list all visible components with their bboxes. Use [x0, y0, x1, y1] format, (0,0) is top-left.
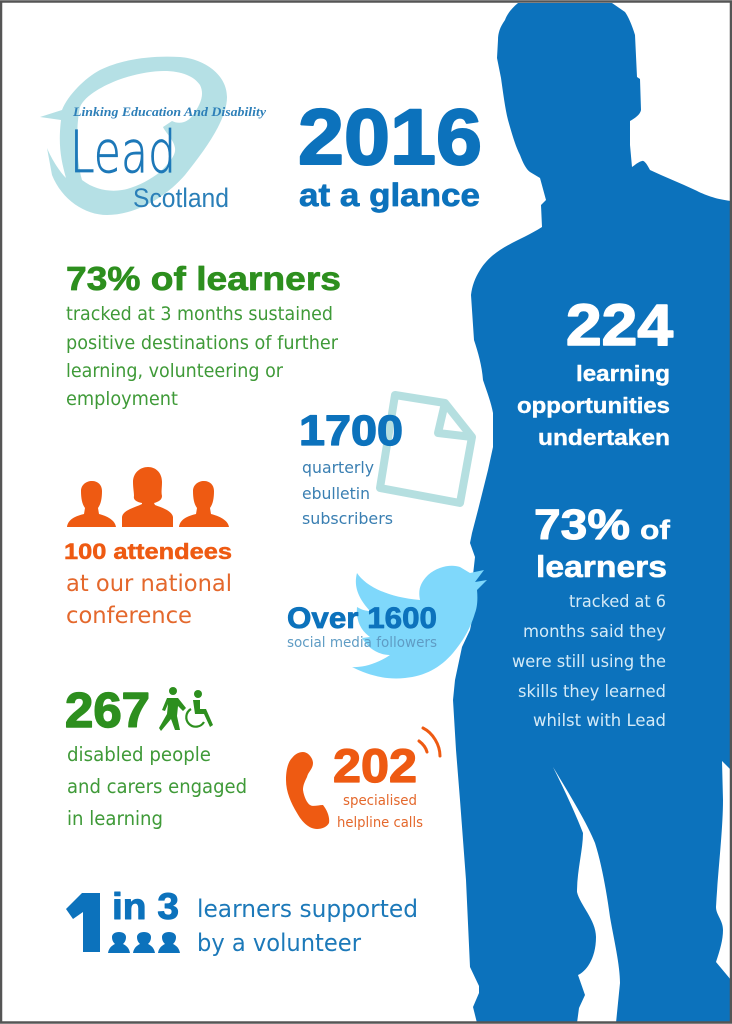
- logo wordmark Scotland: Scotland: [133, 183, 229, 213]
- stat: 1700 subscribers: ebulletin: [302, 484, 370, 503]
- icon: twitter bird: [352, 566, 487, 678]
- text: learners supported by a volunteer: by a volunteer: [197, 929, 361, 957]
- stat: 73% of learners tracked at 6 months: [512, 501, 671, 731]
- stat: 73% of learners tracked at 6 months: whilst with Lead: [533, 711, 666, 731]
- stat: 224 learning opportunities: learning: [576, 361, 670, 386]
- stat: over 1600 followers: [287, 602, 437, 651]
- stat: 1700 subscribers: quarterly: [302, 458, 374, 477]
- icon: telephone: [286, 752, 329, 829]
- text: in 3: in 3: [112, 886, 179, 927]
- text: learners supported by a volunteer: learners supported: [197, 895, 418, 923]
- stat: 202 helpline calls: specialised: [343, 793, 417, 809]
- stat: 224 learning opportunities: undertaken: [538, 425, 670, 450]
- stat: 73% of learners tracked at 3 months: tracked at 3 months sustained: [66, 303, 333, 325]
- stat: 100 attendees: [64, 539, 232, 629]
- stat: 202 helpline calls: 202: [333, 739, 417, 792]
- stat: 73% of learners tracked at 3 months: [66, 260, 341, 410]
- stat: 73% of learners tracked at 6 months: learners: [536, 549, 667, 584]
- stat: 224 learning opportunities: [517, 293, 673, 450]
- stat: 100 attendees: 100 attendees: [64, 539, 232, 564]
- stat: 73% of learners tracked at 6 months: months said they: [523, 622, 666, 642]
- stat: 267 disabled people: 267: [65, 684, 150, 738]
- stat: 100 attendees: at our national: [66, 571, 232, 597]
- stat: 73% of learners tracked at 6 months: tracked at 6: [569, 592, 666, 612]
- logo swoosh: [40, 57, 227, 215]
- stat: 73% of learners tracked at 3 months: employment: [66, 388, 178, 410]
- stat: 1700 subscribers: 1700: [299, 407, 403, 455]
- stat: over 1600 followers: social media followers: [287, 635, 437, 651]
- stat: 100 attendees: conference: [66, 603, 192, 629]
- numeral 1: [66, 893, 100, 952]
- title: 2016: [298, 92, 482, 181]
- stat: 224 learning opportunities: 224: [566, 293, 673, 358]
- stat: 224 learning opportunities: opportunities: [517, 393, 670, 418]
- stat: 73% of learners tracked at 3 months: learning, volunteering or: [66, 360, 283, 382]
- stat: 1 in 3 learners: [66, 886, 418, 957]
- stat: 202 helpline calls: helpline calls: [337, 815, 423, 831]
- icon: document: [380, 395, 472, 503]
- stat: over 1600 followers: Over 1600: [287, 602, 437, 635]
- icon: walking person and wheelchair user: [159, 687, 213, 731]
- icon: three people, orange: [67, 467, 229, 527]
- title: at a glance: [299, 177, 480, 213]
- logo tagline: Linking Education And Disability: [72, 104, 266, 119]
- stat: 267 disabled people: [65, 684, 247, 830]
- stat: 202 helpline calls: [333, 739, 423, 831]
- logo: [40, 57, 266, 215]
- stat: 1700 subscribers: [299, 407, 403, 528]
- icon: three small people: [108, 932, 180, 953]
- stat: 73% of learners tracked at 3 months: positive destinations of further: [66, 332, 338, 354]
- icon: sound waves: [419, 728, 440, 756]
- stat: 73% of learners tracked at 6 months: of: [640, 515, 671, 545]
- person silhouette: [453, 3, 731, 1023]
- logo wordmark Lead: Lead: [70, 118, 176, 186]
- stat: 267 disabled people: in learning: [67, 807, 163, 830]
- stat: 73% of learners tracked at 3 months: 73% of learners: [66, 260, 341, 297]
- text: learners supported by a volunteer: [197, 895, 418, 957]
- stat: 1700 subscribers: subscribers: [302, 509, 393, 528]
- stat: 267 disabled people: and carers engaged: [67, 775, 247, 798]
- stat: 73% of learners tracked at 6 months: 73%: [534, 501, 630, 549]
- stat: 267 disabled people: disabled people: [67, 743, 211, 766]
- stat: 73% of learners tracked at 6 months: skills they learned: [518, 682, 666, 702]
- stat: 73% of learners tracked at 6 months: were still using the: [512, 652, 666, 672]
